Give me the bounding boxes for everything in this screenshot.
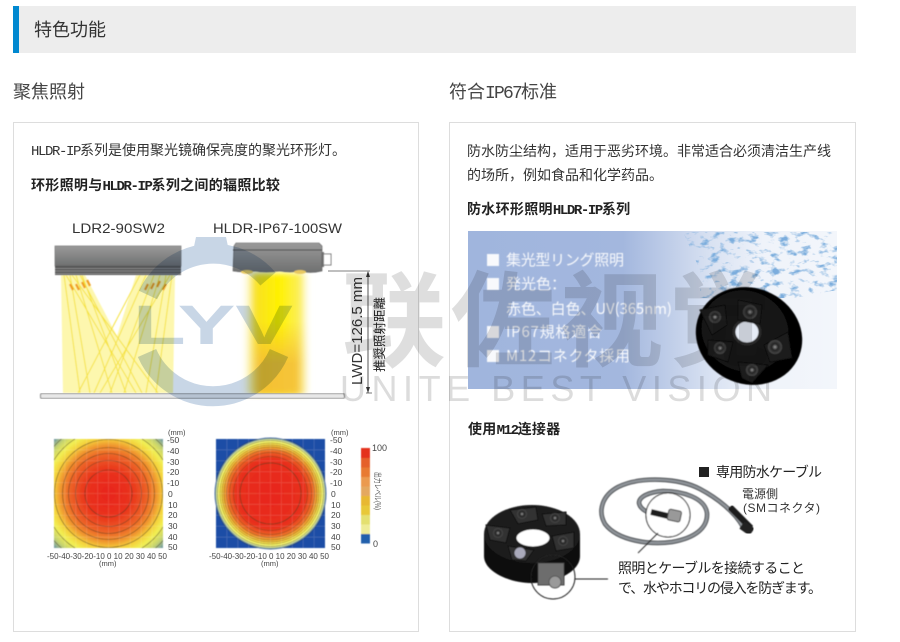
feature list: 赤色、白色、UV(365nm) [506,298,672,319]
axis labels: right heatmap: 50 [331,542,341,552]
panel: IP67 compliance [449,122,856,632]
cable [601,480,743,543]
axis labels: right heatmap: -10 [330,478,343,488]
ring light product [681,271,817,401]
axis labels: right heatmap [209,428,349,568]
axis labels: right heatmap: 0 [331,489,336,499]
axis labels: left heatmap: 0 [168,489,173,499]
cable caption: 専用防水ケーブル [716,464,822,480]
axis labels: right heatmap: -20 [330,467,343,477]
axis labels: left heatmap: -30 [167,457,180,467]
axis labels: right heatmap: 40 [331,532,341,542]
watermark: gear logo: LYV [133,293,293,356]
heatmap: HLDR-IP67-100SW [214,438,326,550]
axis labels: left heatmap: -10 [167,478,180,488]
detail circle: lamp connector [531,555,608,599]
label: LDR2-90SW2: LDR2-90SW2 [72,220,165,236]
power side label: 電源側 [742,487,778,501]
axis labels: left heatmap: (mm) [99,559,117,568]
label: LWD: LWD=126.5 mm [350,277,366,385]
legend: output level: 出力レベル(%) [373,472,383,510]
light unit: LDR2 [55,246,181,275]
axis labels: left heatmap: -20 [167,467,180,477]
axis labels: right heatmap: (mm) [331,428,349,437]
light unit: HLDR [233,243,331,274]
feature list: 発光色： [506,273,566,294]
watermark: gear logo [133,237,293,396]
feature list: IP67規格適合 [506,321,602,342]
axis labels: left heatmap: 10 [168,500,178,510]
ring light body [484,505,580,583]
axis labels: left heatmap [47,428,186,568]
header bar [13,6,856,53]
legend color scale [361,448,370,544]
image: waterproof ring light banner [468,231,837,401]
label: recommended distance: 推奨照射距離 [372,297,387,372]
heading: IP67 compliance: 符合IP67标准 [449,78,557,104]
axis labels: left heatmap: 40 [168,532,178,542]
water splash [683,232,837,300]
diagram: working distance comparison [40,220,387,398]
feature list: 集光型リング照明 [506,249,624,270]
axis labels: left heatmap: (mm) [168,428,186,437]
header accent [13,6,19,53]
text: waterproof description [467,141,831,185]
detail circle: cable connector [638,493,690,553]
axis labels: left heatmap: -50-40-30-20-10 0 10 20 30 40 50 [47,551,167,561]
axis labels: right heatmap: -50-40-30-20-10 0 10 20 30 40 50 [209,551,329,561]
connection note: で、水やホコリの侵入を防ぎます。 [618,580,822,596]
connection note [618,560,822,596]
axis labels: left heatmap: 20 [168,510,178,520]
light beams: LDR2 [61,275,175,393]
label: HLDR-IP67-100SW: HLDR-IP67-100SW [213,220,343,236]
axis labels: right heatmap: -50 [330,435,343,445]
title: 特色功能 [34,16,106,42]
axis labels: left heatmap: 50 [168,542,178,552]
axis labels: left heatmap: -40 [167,446,180,456]
subheading: M12 connector: 使用M12连接器 [468,419,561,439]
text: waterproof description: 的场所，例如食品和化学药品。 [467,165,663,185]
axis labels: right heatmap: 10 [331,500,341,510]
heatmap: LDR2-90SW2 [53,438,164,549]
text: focus description: HLDR-IP系列是使用聚光镜确保亮度的聚光环形灯。 [31,140,346,160]
panel: focused illumination [13,122,419,632]
text: waterproof description: 防水防尘结构，适用于恶劣环境。非常适合必须清洁生产线 [467,141,831,161]
axis labels: left heatmap: 30 [168,521,178,531]
work surface [40,394,344,398]
legend labels: 100 [372,443,387,453]
banner background [468,231,837,389]
axis labels: right heatmap: 30 [331,521,341,531]
watermark: english name: UNITE BEST VISION [340,368,772,409]
connector label: (SMコネクタ) [743,501,820,515]
legend: output level [361,443,387,549]
watermark: company name: 联佐视觉 [342,237,772,388]
image: M12 connector illustration [484,464,822,599]
axis labels: right heatmap: (mm) [261,559,279,568]
connection note: 照明とケーブルを接続すること [618,560,805,576]
axis labels: left heatmap: -50 [167,435,180,445]
subheading: waterproof ring light: 防水环形照明HLDR-IP系列 [467,199,630,219]
axis labels: right heatmap: -30 [330,457,343,467]
feature list: M12コネクタ採用 [506,345,630,366]
power-side connector [730,507,752,532]
light beam: HLDR [241,273,311,394]
axis labels: right heatmap: 20 [331,510,341,520]
arrow: working distance [328,271,372,393]
axis labels: right heatmap: -40 [330,446,343,456]
subheading: irradiance comparison: 环形照明与HLDR-IP系列之间的辐照比较 [31,175,280,195]
legend: output level: 0 [373,539,378,549]
feature list [487,249,672,366]
heading: focused illumination: 聚焦照射 [13,78,85,104]
